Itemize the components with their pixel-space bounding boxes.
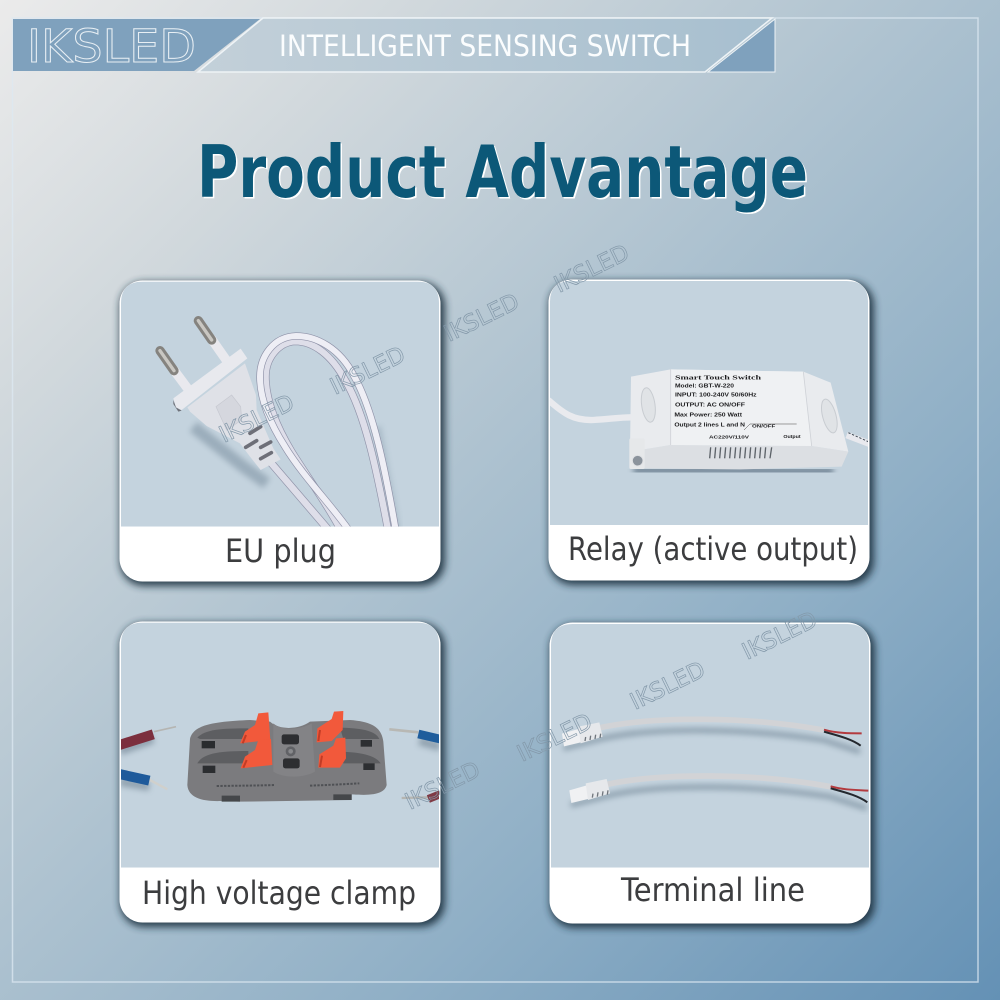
lower cable bbox=[569, 776, 868, 808]
banner title: INTELLIGENT SENSING SWITCH bbox=[279, 29, 691, 63]
wires bbox=[120, 739, 440, 787]
orange levers bbox=[240, 711, 346, 768]
watermarks: IKSLED bbox=[326, 342, 410, 400]
product image: two terminal cables bbox=[551, 624, 869, 868]
module label: OUTPUT: AC ON/OFF bbox=[675, 403, 746, 409]
main heading: Product Advantage bbox=[197, 130, 808, 214]
clamp base detail bbox=[222, 794, 352, 802]
watermarks: IKSLED bbox=[550, 240, 634, 298]
left cable bbox=[548, 400, 632, 420]
pins bbox=[173, 369, 190, 392]
watermarks: IKSLED bbox=[738, 607, 822, 665]
module label bbox=[674, 374, 801, 439]
watermarks: IKSLED bbox=[626, 657, 710, 715]
header banner bbox=[13, 18, 775, 73]
product image: lever clamp and wires bbox=[121, 622, 439, 868]
cable strand inner bbox=[266, 341, 388, 532]
cable strand from plug bbox=[270, 462, 330, 532]
caption: relay: Relay (active output) bbox=[568, 530, 858, 568]
watermarks: IKSLED bbox=[401, 757, 485, 815]
mounting tab bbox=[629, 438, 645, 469]
cable strand outer bbox=[260, 336, 396, 532]
module label: AC220V/110V bbox=[709, 434, 750, 439]
product image: relay module bbox=[550, 281, 868, 525]
watermarks bbox=[215, 240, 822, 815]
upper cable bbox=[562, 719, 862, 752]
watermarks: IKSLED bbox=[440, 289, 524, 347]
right corner block bbox=[708, 19, 775, 72]
vents bbox=[710, 447, 772, 458]
module body bbox=[630, 445, 848, 469]
caption: EU plug: EU plug bbox=[225, 532, 336, 570]
card: EU plug bbox=[110, 270, 450, 586]
module label: Output 2 lines L and N bbox=[674, 423, 745, 429]
caption: terminal line: Terminal line bbox=[620, 871, 805, 909]
watermarks: IKSLED bbox=[513, 709, 597, 767]
clamp upper body shading bbox=[273, 724, 277, 726]
module label: Max Power: 250 Watt bbox=[674, 413, 742, 419]
clamp slots bbox=[197, 728, 248, 739]
card: Terminal line bbox=[540, 615, 880, 928]
watermarks: IKSLED bbox=[215, 390, 299, 448]
right cable bbox=[847, 435, 870, 444]
banner strip bbox=[198, 18, 772, 72]
product image: plug with cable bbox=[121, 282, 439, 527]
brand block bbox=[13, 19, 260, 71]
brand logo text: IKSLED bbox=[27, 20, 196, 73]
module label: INPUT: 100-240V 50/60Hz bbox=[675, 393, 757, 399]
clamp body bbox=[187, 720, 387, 802]
main heading: Product Advantage bbox=[198, 132, 810, 216]
plug body bbox=[187, 363, 281, 470]
module label: Smart Touch Switch bbox=[675, 374, 761, 381]
card: High voltage clamp bbox=[110, 615, 450, 927]
card: Relay bbox=[540, 270, 880, 585]
module label: ON/OFF bbox=[752, 424, 776, 429]
plug grooves bbox=[246, 427, 271, 459]
module label: Model: GBT-W-220 bbox=[675, 383, 734, 389]
caption: clamp: High voltage clamp bbox=[142, 874, 416, 912]
module label: Output bbox=[783, 434, 801, 439]
